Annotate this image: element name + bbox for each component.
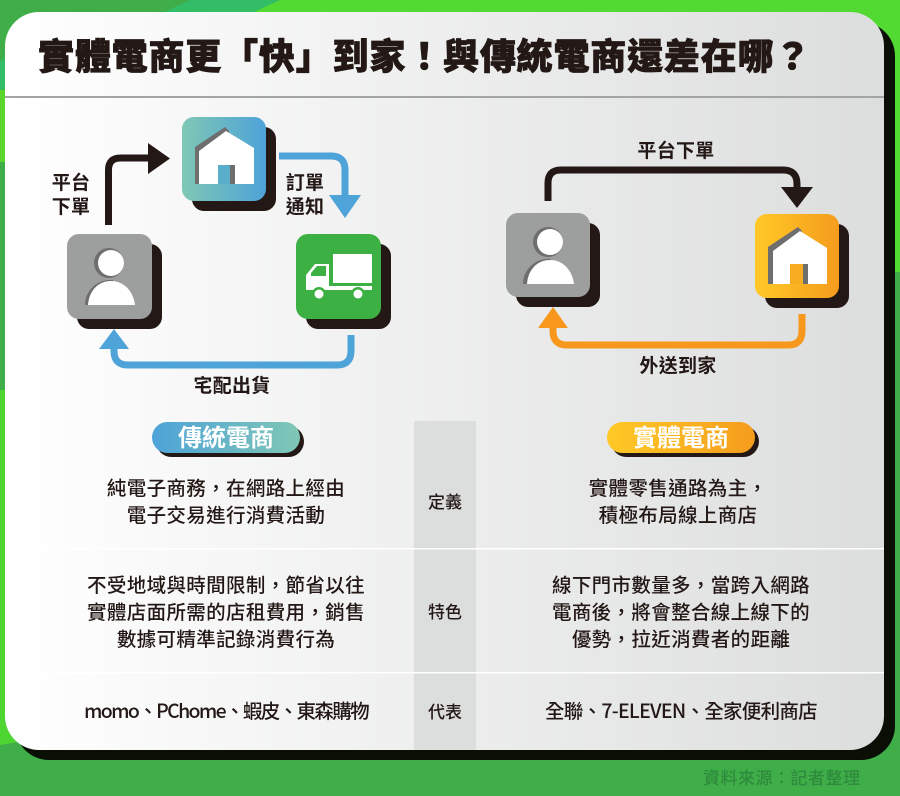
diagram: traditional e-commerce	[52, 117, 391, 397]
arrow: platform order	[108, 143, 170, 225]
row: representatives	[84, 695, 818, 724]
arrow: home delivery	[99, 329, 351, 365]
text: traditional definition: 純電子商務，在網路上經由	[107, 472, 345, 501]
text: traditional representatives: momo、PChome、蝦皮、東森購物	[84, 695, 370, 724]
label: features: 特色	[428, 603, 462, 622]
icon: store	[755, 214, 849, 308]
label: order notice: 訂單	[286, 172, 324, 194]
icon: person	[506, 213, 600, 307]
heading: physical retail e-commerce	[607, 422, 759, 457]
arrow: home delivery	[538, 307, 802, 345]
label: home delivery: 宅配出貨	[193, 375, 271, 397]
label: definition: 定義	[428, 492, 462, 512]
heading: traditional e-commerce	[152, 422, 304, 457]
text: traditional features: 數據可精準記錄消費行為	[117, 623, 335, 652]
source note: 資料來源：記者整理	[703, 768, 860, 788]
text: traditional definition: 電子交易進行消費活動	[127, 499, 325, 528]
heading: traditional e-commerce: 傳統電商	[178, 425, 274, 452]
arrow: platform order	[548, 170, 813, 208]
title divider	[5, 96, 884, 98]
label: platform order: 下單	[52, 197, 90, 218]
text: physical features: 優勢，拉近消費者的距離	[572, 623, 790, 652]
text: physical features: 電商後，將會整合線上線下的	[552, 596, 810, 625]
arrow: order notice	[279, 156, 361, 218]
label: representatives: 代表	[428, 703, 462, 722]
label: platform order: 平台	[52, 171, 90, 194]
text: traditional features: 實體店面所需的店租費用，銷售	[87, 596, 365, 625]
label: home delivery: 外送到家	[639, 354, 717, 377]
icon: truck	[296, 234, 391, 329]
text: physical definition: 積極布局線上商店	[599, 499, 757, 528]
label: order notice: 通知	[286, 196, 324, 218]
text: physical features: 線下門市數量多，當跨入網路	[552, 569, 810, 598]
text: traditional features: 不受地域與時間限制，節省以往	[87, 569, 365, 598]
row: definition	[107, 472, 767, 528]
title: 實體電商更「快」到家！與傳統電商還差在哪？	[38, 36, 811, 77]
icon: store	[182, 117, 276, 211]
text: physical definition: 實體零售通路為主，	[589, 472, 767, 501]
text: physical representatives: 全聯、7-ELEVEN、全家便利商店	[545, 695, 818, 724]
center label column	[414, 421, 476, 750]
diagram: physical retail e-commerce	[506, 139, 849, 377]
row: features	[87, 569, 810, 652]
icon: person	[67, 234, 162, 329]
label: platform order: 平台下單	[637, 139, 715, 162]
heading: physical retail e-commerce: 實體電商	[633, 425, 729, 452]
